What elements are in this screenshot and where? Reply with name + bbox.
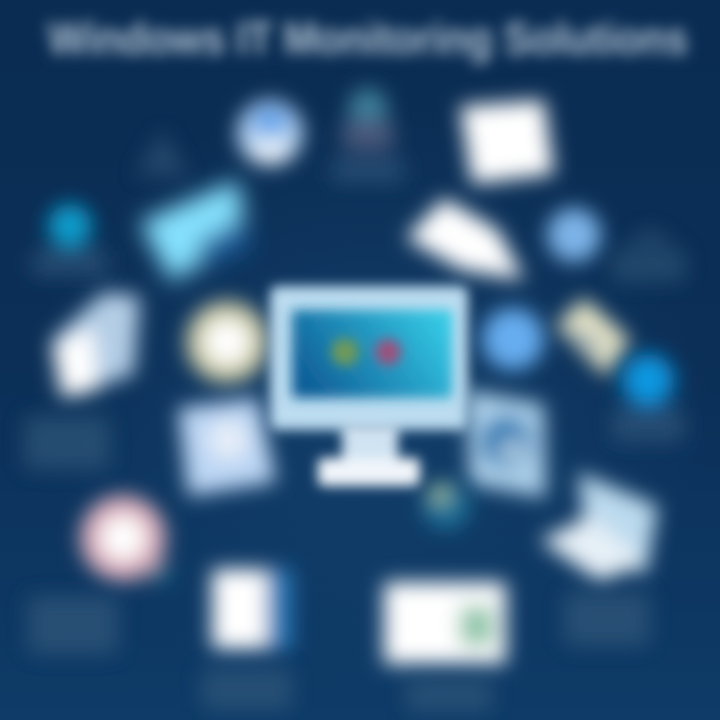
icon: cyan card left xyxy=(140,180,250,282)
icon: white cloud right xyxy=(406,198,524,280)
label: lower left xyxy=(28,596,118,654)
center glow xyxy=(30,100,710,700)
icon: cream tag right xyxy=(556,298,630,376)
monitor screen xyxy=(292,310,452,398)
label: lower right xyxy=(564,592,650,646)
icon: device right of monitor xyxy=(466,390,546,498)
monitor: central computer xyxy=(270,286,468,486)
label: right faint xyxy=(612,228,686,282)
icon: pink circle lower left xyxy=(80,495,170,582)
icon: document top right xyxy=(460,100,554,184)
icon: top-left faint label xyxy=(135,130,190,176)
icon: cream glowing circle xyxy=(186,301,268,383)
icon: teal badge with label left xyxy=(32,204,108,276)
monitor stand xyxy=(318,424,420,486)
icon: blue globe top xyxy=(237,100,303,166)
icon: person top xyxy=(332,88,404,182)
label: under phone xyxy=(202,668,292,710)
icon: phone lower center-left xyxy=(212,568,292,650)
screen chart dots xyxy=(331,338,401,366)
icon: wide panel lower center xyxy=(384,582,506,664)
icon: blue circle beside monitor xyxy=(482,308,544,370)
label: under panel xyxy=(406,678,492,712)
icon: blue dot right xyxy=(547,208,601,262)
icon: laptop lower right xyxy=(540,472,658,582)
label: left faint xyxy=(24,416,110,470)
icon: tablet left of monitor xyxy=(178,398,276,496)
icon: bright blue badge with label xyxy=(612,354,684,442)
monitor body xyxy=(270,286,468,430)
icon: small teal gem xyxy=(422,481,470,529)
icon: left server tile xyxy=(52,292,140,398)
